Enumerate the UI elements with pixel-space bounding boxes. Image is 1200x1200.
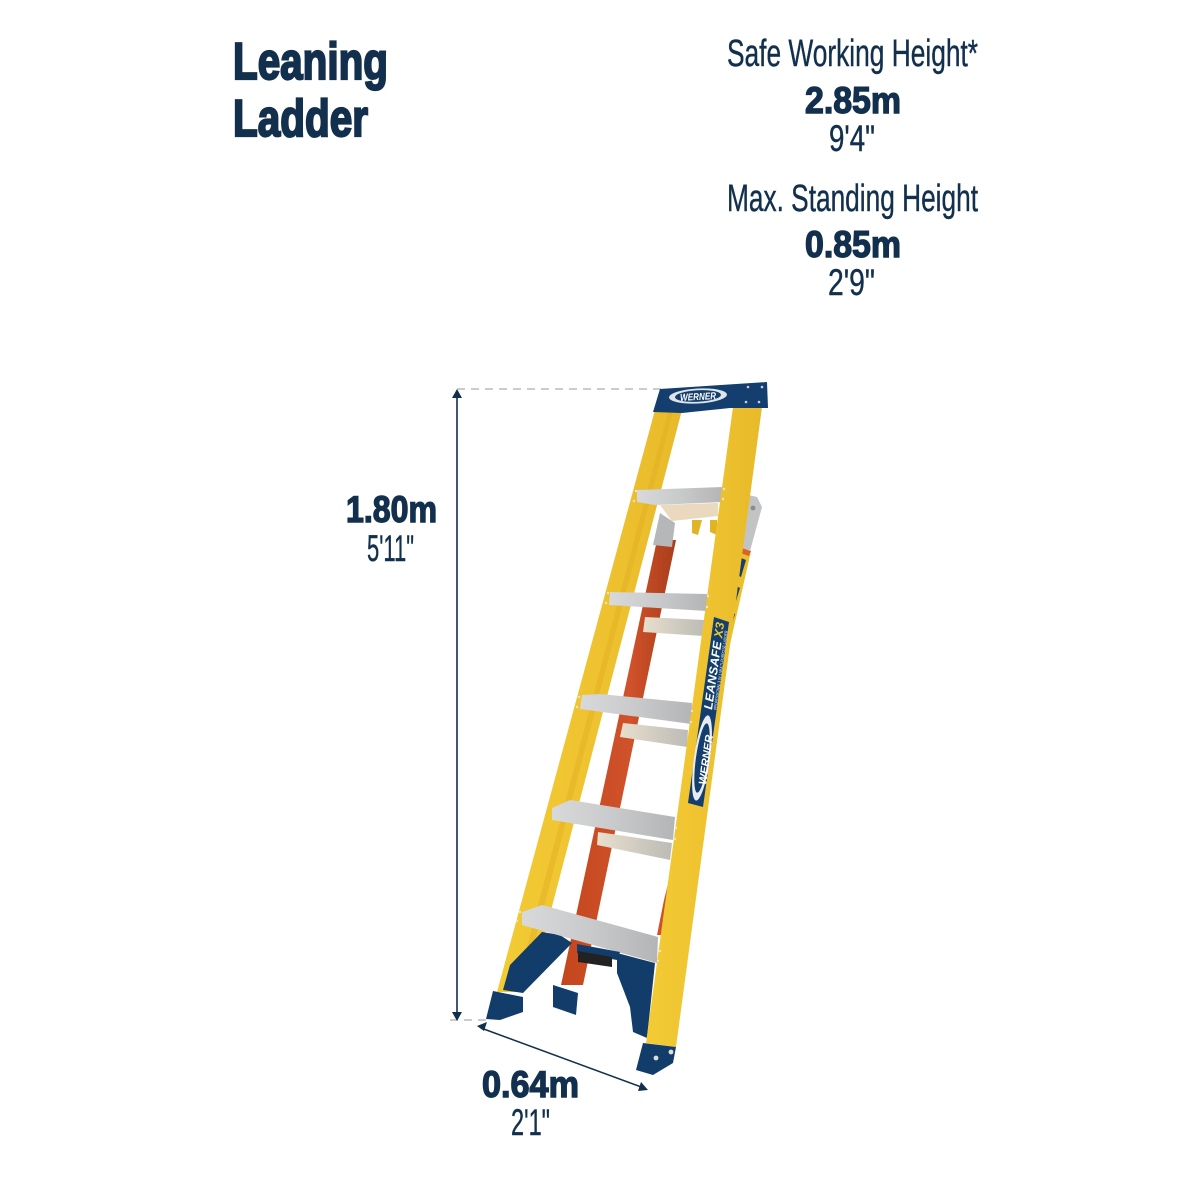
grey bracket xyxy=(743,495,762,551)
height dimension xyxy=(346,389,662,1021)
safe working height spec: Safe Working Height* xyxy=(727,33,978,75)
middle foot xyxy=(553,985,578,1015)
safe working height spec: 9'4" xyxy=(829,118,875,159)
lower brace right xyxy=(617,953,655,1038)
left yellow rail xyxy=(497,410,682,992)
max standing height spec: Max. Standing Height xyxy=(727,178,978,220)
ladder xyxy=(486,382,768,1075)
lower brace left xyxy=(503,932,572,993)
width dimension: 0.64m xyxy=(482,1064,579,1105)
product label xyxy=(688,617,729,807)
top platform step xyxy=(637,487,723,547)
left foot xyxy=(486,991,523,1020)
height dimension: 5'11" xyxy=(367,528,414,569)
title: Leaning xyxy=(233,33,388,91)
max standing height spec xyxy=(727,178,978,303)
top cap with logo xyxy=(653,382,768,413)
right yellow rail xyxy=(646,407,762,1047)
center bracket xyxy=(577,944,620,967)
product label: PROFESSIONAL 3 IN 1 MULTI-PURPOSE LADDER xyxy=(713,630,729,710)
top cap with logo: WERNER xyxy=(680,391,717,404)
right foot xyxy=(636,1043,676,1075)
safe working height spec xyxy=(727,33,978,159)
product label: LEANSAFE X3 xyxy=(701,621,727,710)
under-step braces xyxy=(597,617,704,860)
rivets xyxy=(516,488,725,962)
title: Ladder xyxy=(233,90,368,148)
safe working height spec: 2.85m xyxy=(805,80,901,121)
rear rail with warning stripes xyxy=(712,548,751,680)
max standing height spec: 0.85m xyxy=(805,224,901,265)
width dimension xyxy=(477,1022,648,1143)
max standing height spec: 2'9" xyxy=(828,262,875,303)
steps xyxy=(522,592,707,963)
orange rear rail xyxy=(561,540,676,985)
width dimension: 2'1" xyxy=(511,1102,550,1143)
product label: WERNER xyxy=(697,734,716,785)
title xyxy=(233,33,388,148)
height dimension: 1.80m xyxy=(346,489,437,530)
